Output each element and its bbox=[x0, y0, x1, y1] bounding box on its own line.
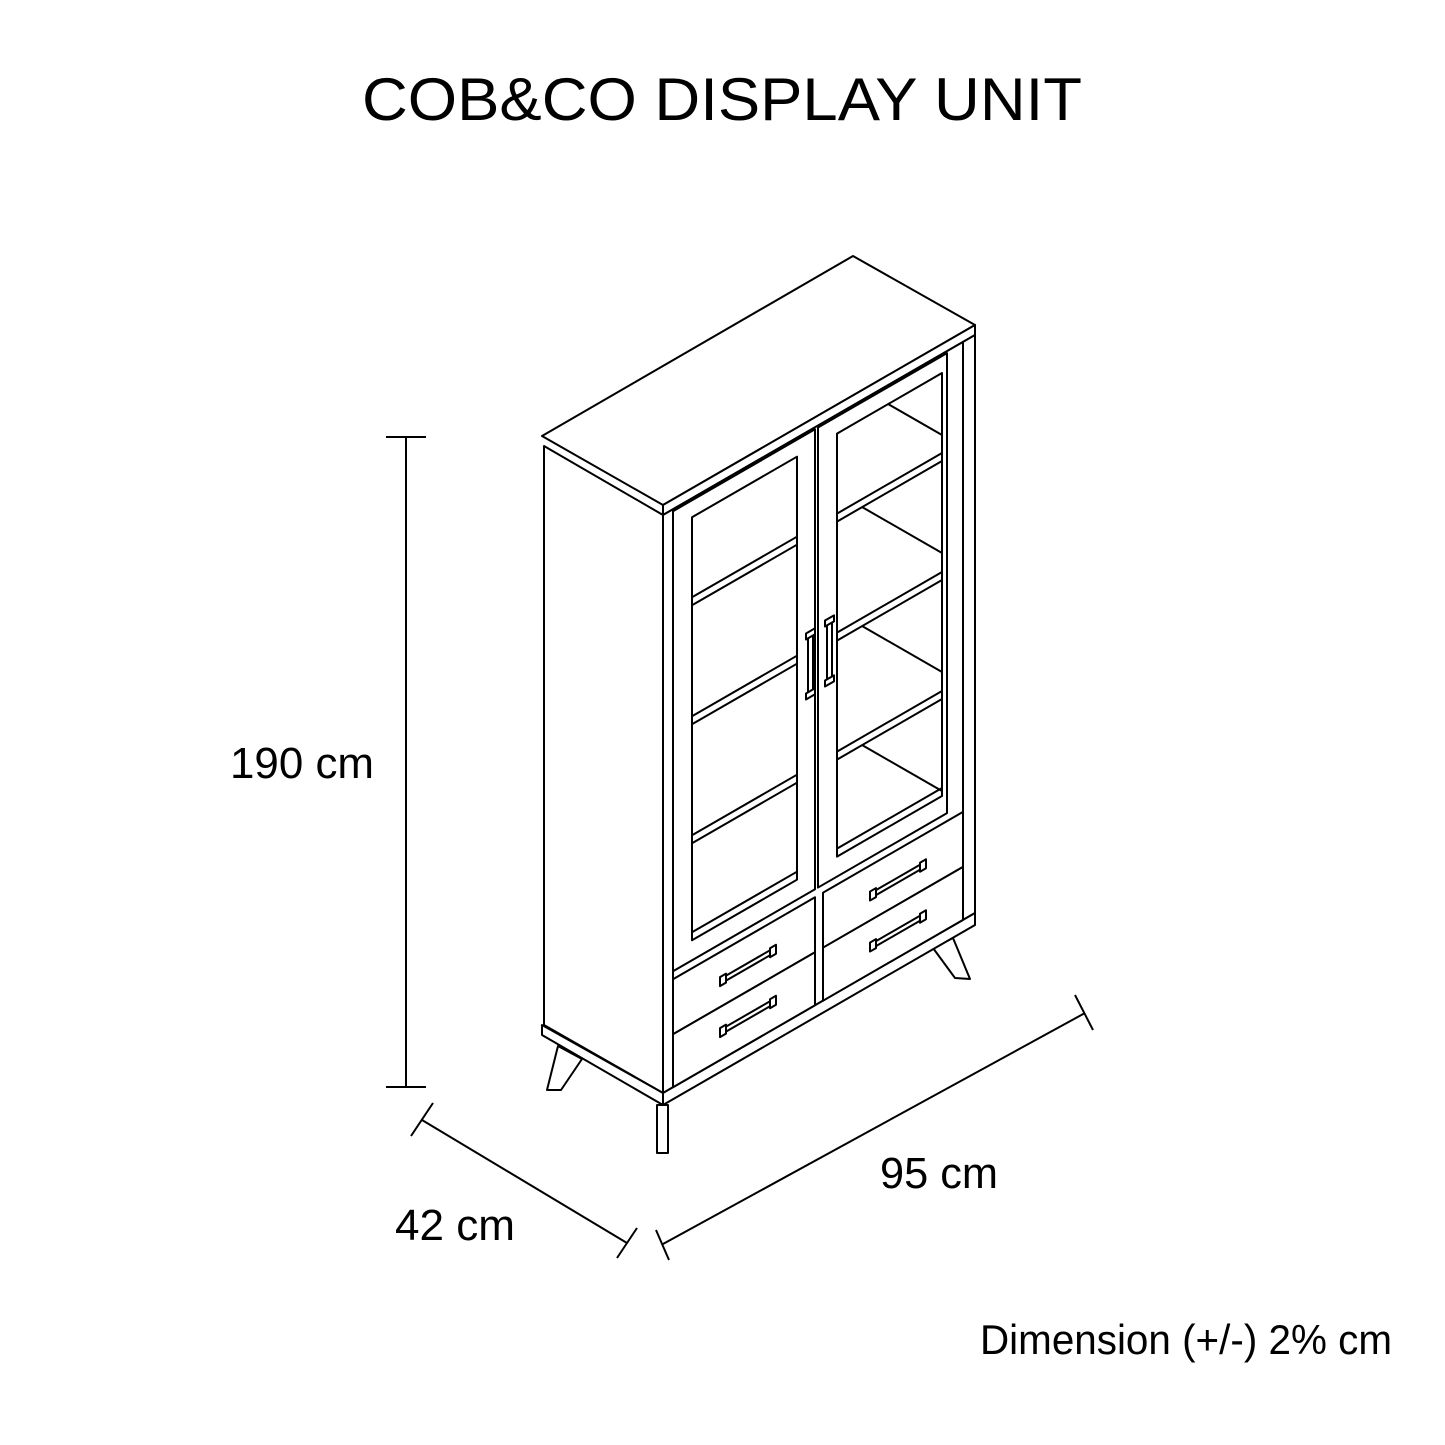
title: COB&CO DISPLAY UNIT bbox=[362, 66, 1082, 133]
label: 95 cm: 95 cm bbox=[880, 1149, 998, 1198]
side strips bbox=[672, 509, 674, 1087]
right glass door bbox=[818, 353, 947, 888]
left side panel bbox=[544, 446, 663, 1093]
legs bbox=[547, 938, 970, 1153]
cabinet drawing bbox=[542, 256, 975, 1153]
drawer handles bbox=[720, 858, 926, 1038]
cabinet top surface bbox=[542, 256, 975, 505]
front face (skewed plane) bbox=[663, 325, 975, 1105]
top slab front edge bbox=[663, 325, 975, 515]
dimension: width bbox=[656, 995, 1093, 1260]
dimension: depth bbox=[411, 1103, 637, 1258]
label: 42 cm: 42 cm bbox=[395, 1201, 515, 1250]
drawers bbox=[673, 812, 963, 1087]
dimension: height bbox=[386, 437, 426, 1087]
footnote: Dimension (+/-) 2% cm bbox=[980, 1316, 1392, 1363]
door handles bbox=[806, 615, 834, 699]
interior shelf depth lines bbox=[862, 404, 942, 791]
front plinth bbox=[663, 913, 975, 1105]
label: 190 cm: 190 cm bbox=[230, 739, 374, 788]
front body bbox=[663, 335, 975, 1093]
left side plinth bbox=[542, 1025, 663, 1105]
left glass door bbox=[673, 429, 815, 971]
